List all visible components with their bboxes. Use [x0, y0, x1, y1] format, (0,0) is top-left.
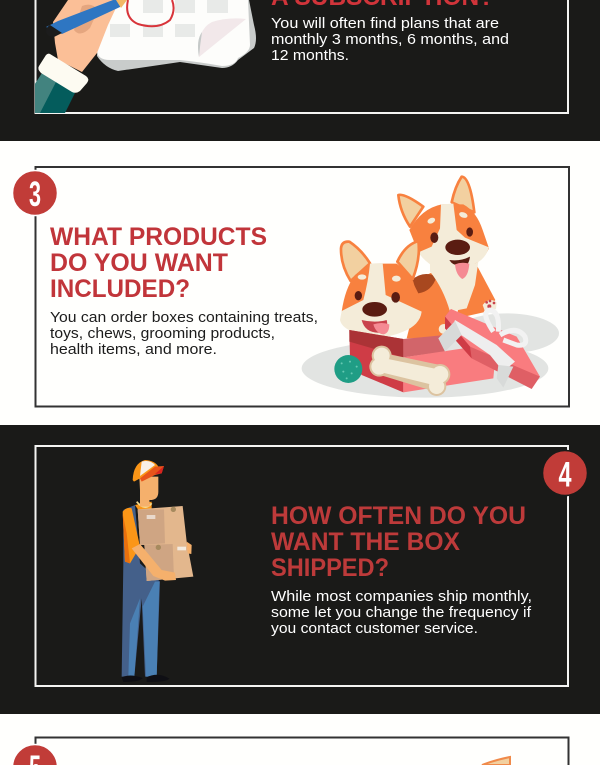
panel: shipping frequency	[0, 425, 600, 714]
badge: number 5	[12, 744, 58, 765]
illustration: ear tip	[482, 757, 510, 765]
heading: products included: WHAT PRODUCTS	[50, 223, 267, 251]
badge: number 3: 3	[29, 175, 41, 214]
text: products included: health items, and more.	[50, 342, 217, 358]
panel: subscription length	[0, 0, 600, 141]
text: shipping frequency: you contact customer service.	[271, 621, 478, 637]
text: subscription length: You will often find plans that are	[271, 16, 499, 32]
panel: products included	[0, 141, 600, 425]
icon: calendar being marked by a hand	[35, 0, 256, 113]
text: products included: You can order boxes containing treats,	[50, 310, 318, 326]
text: shipping frequency: While most companies ship monthly,	[271, 589, 532, 605]
text: subscription length	[271, 16, 509, 64]
text: shipping frequency	[271, 589, 532, 637]
badge: number 4: 4	[558, 456, 572, 494]
badge: number 4	[542, 450, 588, 496]
illustration: delivery worker carrying boxes	[122, 460, 193, 682]
badge: number 3	[12, 170, 58, 216]
panel: next section	[0, 714, 600, 765]
heading: products included: INCLUDED?	[50, 275, 190, 303]
heading: shipping frequency: HOW OFTEN DO YOU	[271, 502, 526, 530]
heading: products included: DO YOU WANT	[50, 249, 228, 277]
text: subscription length: 12 months.	[271, 48, 349, 64]
text: products included	[50, 310, 318, 358]
heading: shipping frequency: SHIPPED?	[271, 554, 389, 582]
illustration: corgis in a gift box	[302, 177, 559, 398]
text: subscription length: monthly 3 months, 6 months, and	[271, 32, 509, 48]
text: shipping frequency: some let you change the frequency if	[271, 605, 532, 621]
text: products included: toys, chews, grooming products,	[50, 326, 275, 342]
heading: products included	[50, 223, 267, 303]
heading: shipping frequency: WANT THE BOX	[271, 528, 460, 556]
heading: shipping frequency	[271, 502, 526, 582]
